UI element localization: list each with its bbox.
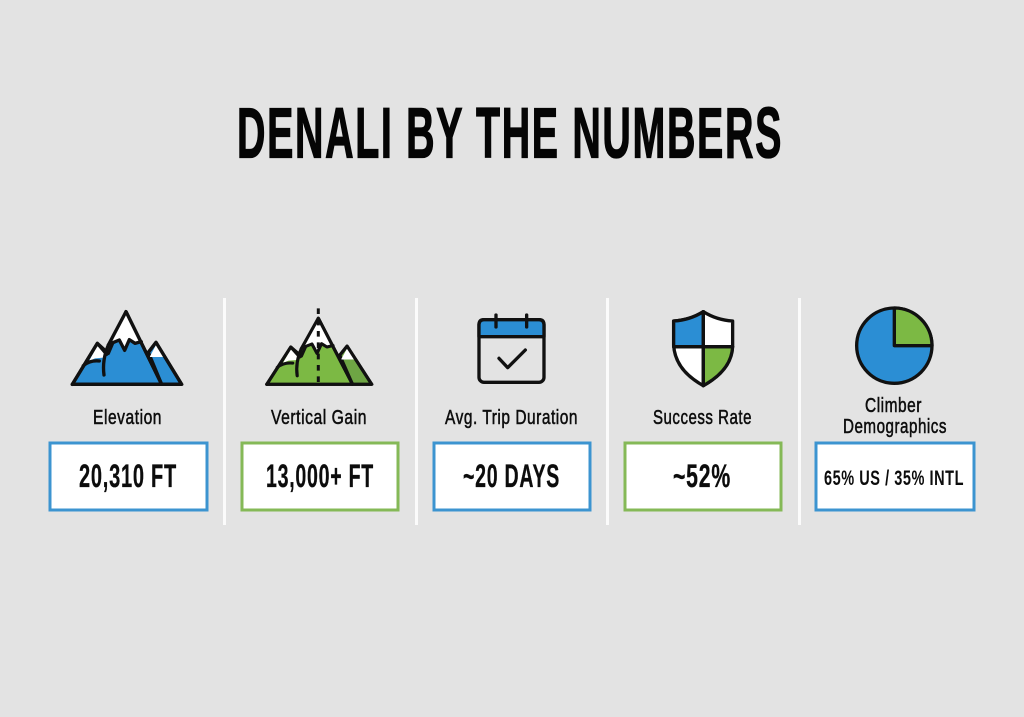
value box: climber demographics <box>816 443 974 510</box>
value box: success rate: ~52% <box>673 458 731 494</box>
icon: calendar with check <box>479 315 544 382</box>
label: climber demographics: Demographics <box>843 415 947 438</box>
value box: average trip duration <box>434 443 590 510</box>
value box: elevation: 20,310 FT <box>79 458 177 494</box>
label: success rate: Success Rate <box>653 406 752 429</box>
icon: pie chart <box>857 308 932 383</box>
value box: success rate <box>625 443 781 510</box>
icon: green mountain with route <box>267 308 372 384</box>
value box: elevation <box>50 443 207 510</box>
value box: vertical gain: 13,000+ FT <box>266 458 374 494</box>
label: elevation: Elevation <box>93 406 162 429</box>
panel: average trip duration <box>434 315 590 510</box>
panel: vertical gain <box>242 308 398 510</box>
label: climber demographics <box>843 394 947 438</box>
panel: elevation <box>50 312 207 510</box>
label: vertical gain: Vertical Gain <box>271 406 367 429</box>
value box: average trip duration: ~20 DAYS <box>463 458 560 494</box>
icon: blue mountain <box>72 312 182 384</box>
value box: vertical gain <box>242 443 398 510</box>
label: average trip duration: Avg. Trip Duration <box>445 406 578 429</box>
icon: quartered shield <box>674 312 733 386</box>
panel: success rate <box>625 312 781 510</box>
label: climber demographics: Climber <box>865 394 922 417</box>
panel: climber demographics <box>816 308 974 510</box>
